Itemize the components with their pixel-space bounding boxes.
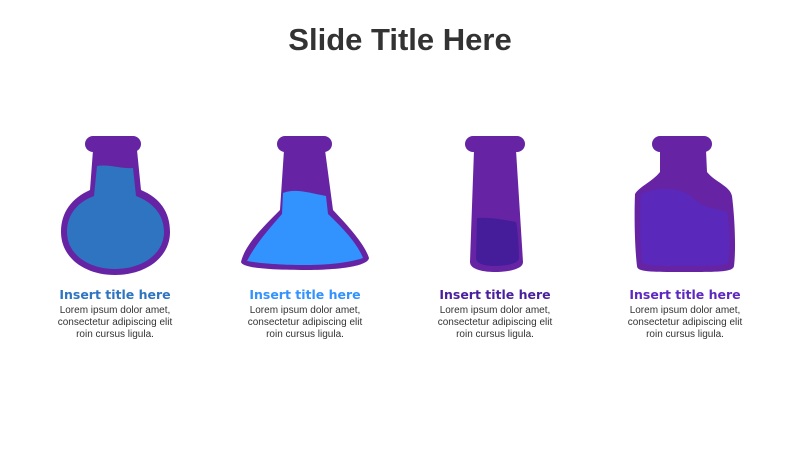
text block 2: Insert title here <box>249 287 361 302</box>
text block 1: Insert title here <box>59 287 171 302</box>
text block 3: roin cursus ligula. <box>456 329 534 340</box>
text block 2: consectetur adipiscing elit <box>248 317 362 328</box>
text block 2 <box>248 287 362 340</box>
title: Slide Title Here <box>288 22 512 57</box>
icon: square bottle <box>635 136 735 272</box>
text block 4: Insert title here <box>629 287 741 302</box>
icon: round flask <box>61 136 170 275</box>
text block 3: consectetur adipiscing elit <box>438 317 552 328</box>
text block 1: Lorem ipsum dolor amet, <box>60 305 170 316</box>
text block 3: Insert title here <box>439 287 551 302</box>
text block 3: Lorem ipsum dolor amet, <box>440 305 550 316</box>
text block 4 <box>628 287 742 340</box>
text block 4: Lorem ipsum dolor amet, <box>630 305 740 316</box>
text block 4: consectetur adipiscing elit <box>628 317 742 328</box>
text block 1 <box>58 287 172 340</box>
text block 3 <box>438 287 552 340</box>
text block 2: Lorem ipsum dolor amet, <box>250 305 360 316</box>
text block 4: roin cursus ligula. <box>646 329 724 340</box>
icon: conical flask <box>241 136 369 270</box>
text block 2: roin cursus ligula. <box>266 329 344 340</box>
text block 1: consectetur adipiscing elit <box>58 317 172 328</box>
text block 1: roin cursus ligula. <box>76 329 154 340</box>
icon: test tube bottle <box>465 136 525 272</box>
